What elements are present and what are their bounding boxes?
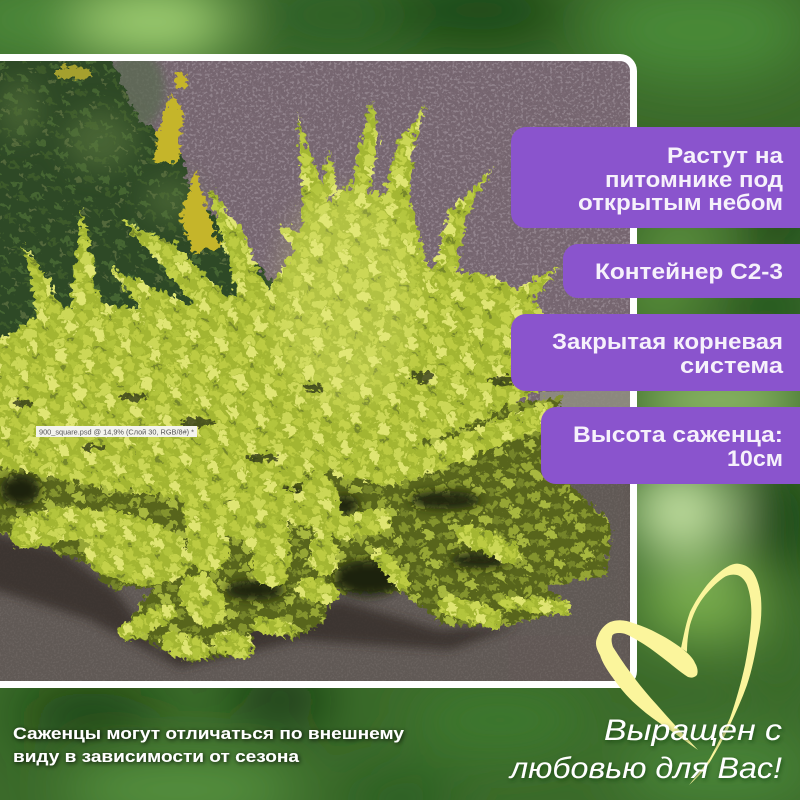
- slogan: любовью для Вас!: [508, 752, 783, 785]
- see-through shrub top: [112, 61, 170, 126]
- bright highlight on bush core: [275, 190, 415, 410]
- small gaps in upper bush: [10, 370, 512, 459]
- slogan: Выращен с: [604, 714, 782, 747]
- panel: root system: [511, 314, 800, 391]
- panel: container: [563, 244, 800, 298]
- panel: nursery: [511, 127, 800, 228]
- lighter foliage in shrub: [0, 80, 195, 220]
- mid-tone lower bush mass: [0, 395, 610, 660]
- note: seasonal appearance: виду в зависимости от сезона: [13, 747, 300, 766]
- dark shrub: [0, 61, 273, 338]
- note: seasonal appearance: [13, 724, 405, 766]
- ground grain: [0, 484, 630, 681]
- stone kerb: [540, 391, 630, 407]
- panel: seedling height: 10см: [727, 446, 783, 471]
- panel: root system: система: [680, 353, 784, 378]
- icon: hand-drawn heart: [596, 564, 761, 785]
- photo frame: [0, 54, 637, 688]
- slogan: [508, 714, 783, 785]
- ground texture: [0, 438, 630, 711]
- dark hollows in lower bush: [0, 474, 510, 600]
- note: seasonal appearance: Саженцы могут отличаться по внешнему: [13, 724, 405, 743]
- bright bush mass: [0, 98, 570, 500]
- ground shadow near bush: [0, 530, 520, 668]
- panel: nursery: Растут на: [667, 143, 784, 168]
- panel: root system: Закрытая корневая: [552, 329, 783, 354]
- ground: [0, 484, 630, 681]
- wall texture: [114, 61, 630, 402]
- yellow flower spikes: [50, 64, 218, 250]
- panel: container: Контейнер С2-3: [595, 259, 783, 284]
- panel: seedling height: [541, 407, 800, 484]
- panel: nursery: питомнике под: [605, 167, 783, 192]
- panel: nursery: открытым небом: [578, 190, 783, 215]
- photo: barberry bush: [0, 50, 630, 711]
- screenshot tooltip label: 900_square.psd @ 14,9% (Слой 30, RGB/8#) *: [39, 428, 194, 436]
- bright lower branches: [24, 414, 562, 648]
- gravel wall: [108, 61, 630, 407]
- panel: seedling height: Высота саженца:: [573, 422, 783, 447]
